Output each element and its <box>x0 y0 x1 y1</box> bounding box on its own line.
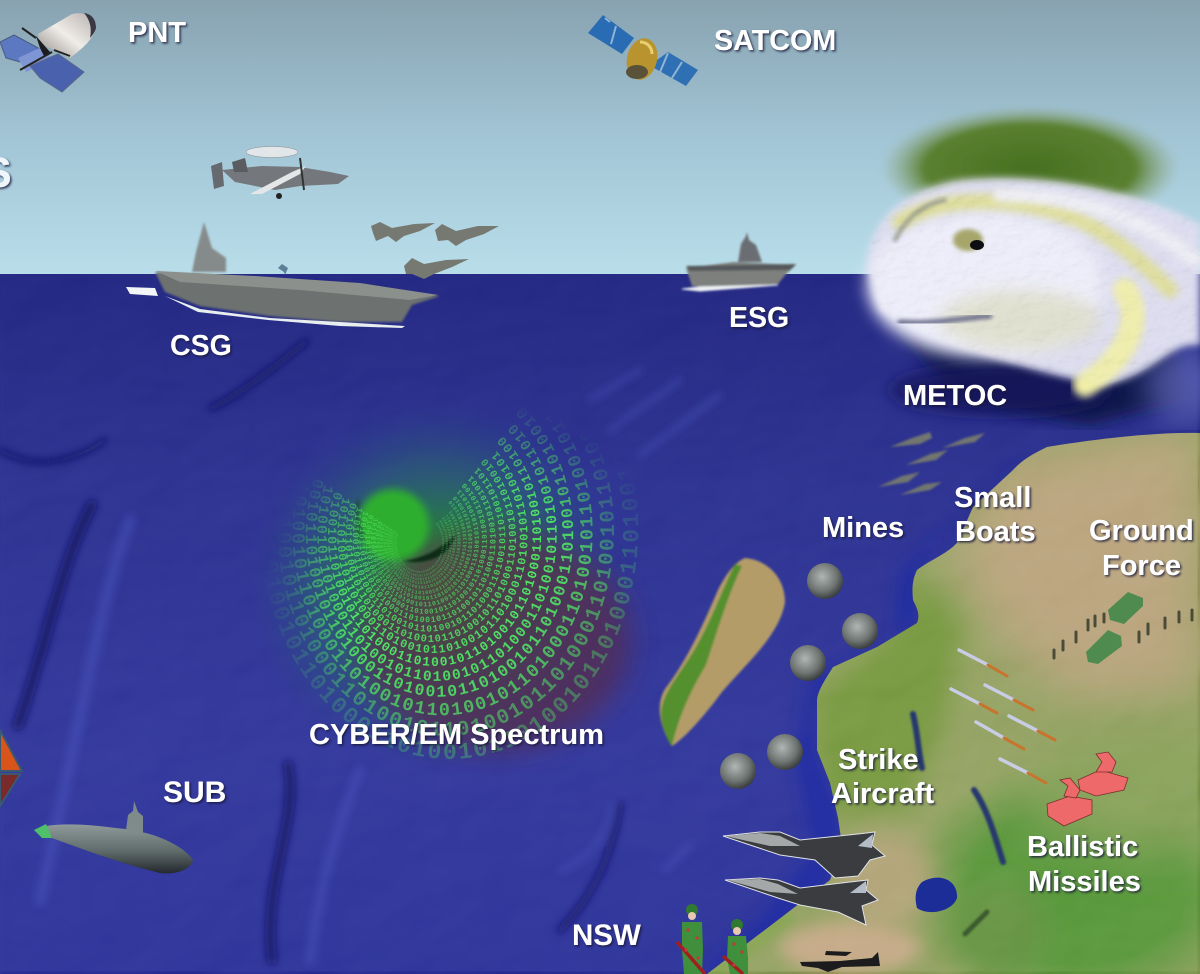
cyber vortex: 00101101001011010001101001011010010110100011010010110100101101 <box>306 410 574 697</box>
cyber vortex: 01101001011010001011010010110100011010010110100101101000 <box>392 520 448 577</box>
icon: aircraft carrier CSG <box>126 222 440 328</box>
icon: amphibious ship ESG <box>682 232 796 291</box>
icon: missiles <box>951 650 1055 783</box>
label: NSW: NSW <box>572 919 641 952</box>
icon: NSW soldiers <box>677 904 748 974</box>
label: Ground Force: Ground <box>1089 515 1194 547</box>
icon: fighter formation <box>371 222 499 279</box>
icon: distant aircraft <box>800 951 880 972</box>
icon: naval mines <box>720 563 878 789</box>
icon: PNT satellite <box>0 13 96 92</box>
island <box>660 558 785 746</box>
label: Ground Force: Force <box>1102 550 1181 582</box>
land: African coast <box>700 425 1200 974</box>
label: Small Boats <box>954 482 1036 548</box>
label: Ballistic Missiles: Ballistic <box>1027 831 1138 863</box>
label: Mines: Mines <box>822 512 904 544</box>
icon: submarine <box>34 801 193 873</box>
label: CYBER/EM Spectrum: CYBER/EM Spectrum <box>309 719 604 751</box>
icon: missile launchers <box>1047 752 1128 826</box>
label: Strike Aircraft <box>831 744 934 810</box>
icon: clipped triangle at left edge <box>0 730 22 806</box>
cyber vortex: 01001011010010110100011010010110100101101000110100101101001011 <box>365 484 487 614</box>
cyber vortex: 10010110100101100010110100101101000110100101101001011010 <box>390 517 452 580</box>
icon: small boats <box>878 432 985 495</box>
cyber vortex: 10010110100101101000110100101101001011010001101001011010010110 <box>359 476 496 622</box>
label: SUB: SUB <box>163 776 226 809</box>
label: METOC: METOC <box>903 380 1007 412</box>
cyber vortex: 10110100101101000110100101101001011010001101001011010010110100 <box>370 490 480 606</box>
label: SATCOM: SATCOM <box>714 25 836 57</box>
icon: SATCOM satellite <box>588 15 698 86</box>
label: Small Boats: Small <box>954 482 1031 514</box>
label: Ballistic Missiles: Missiles <box>1028 866 1141 898</box>
icon: ground force vehicles and troops <box>1054 592 1192 664</box>
icon: strike aircraft <box>723 832 885 925</box>
green earth cap <box>884 107 1176 202</box>
dark storm shadow <box>898 334 1184 430</box>
label: Ground Force <box>1089 515 1194 582</box>
label: Strike Aircraft: Aircraft <box>831 778 934 810</box>
cyber vortex: 01001011010010110100011010010110100101101000110100101101001011 <box>328 438 542 666</box>
label: ESG: ESG <box>729 302 789 334</box>
icon: E-2 Hawkeye aircraft <box>211 146 349 199</box>
cyber vortex: 10110100101101000110100101101001011010001101001011010010110100 <box>337 451 528 653</box>
label: CSG: CSG <box>170 330 232 362</box>
cyber vortex: 11010010110100011010010110100101101000110100101101001011 <box>387 514 456 584</box>
cyber vortex: 01011010010110100011010010110100101101000110100101101001 <box>384 510 461 589</box>
cyber vortex: 10100101101000110100101101001011010001101001011010010110100101 <box>317 425 557 681</box>
rift lakes <box>913 714 1003 934</box>
label: Strike Aircraft: Strike <box>838 744 919 776</box>
label: Small Boats: Boats <box>955 516 1036 548</box>
sky background <box>0 0 1200 275</box>
ocean background <box>0 274 1200 974</box>
cyber vortex: 10100101101000110100101101001011010001101001011010010110100101 <box>380 501 466 594</box>
cyber vortex: 00101101001011010001101001011010010110100011010010110100101101 <box>376 496 472 600</box>
label: PNT: PNT <box>128 17 186 49</box>
cyber vortex <box>268 410 644 765</box>
cyber vortex: 11010010110100011010010110100101101000110100101101001011010010 <box>352 468 506 632</box>
cyber vortex: 10110100011010010110100101101001011010001101001011010010 <box>395 522 444 573</box>
cyber vortex: 00101101001011010001101001011010010110100011010010110100101101 <box>345 459 516 642</box>
label: Ballistic Missiles <box>1027 831 1141 898</box>
hurricane <box>850 106 1200 425</box>
